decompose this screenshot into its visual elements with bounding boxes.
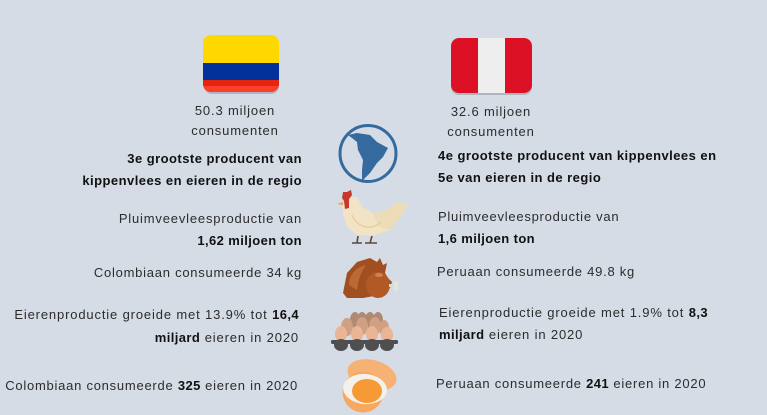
text: Colombia poultry production [119, 211, 302, 248]
text: Peru poultry production: 1,6 miljoen ton [438, 231, 535, 246]
population: Colombia [191, 103, 279, 138]
population: Colombia: consumenten [191, 123, 279, 138]
text: Peru egg production [439, 305, 708, 342]
text: Peru egg production: Eierenproductie groeide met 1.9% tot 8,3 [439, 305, 708, 320]
text: Peru eggs consumed: Peruaan consumeerde 241 eieren in 2020 [436, 376, 706, 391]
population: Peru [447, 104, 535, 139]
icon: egg tray [331, 312, 398, 351]
text: Colombia eggs consumed: Colombiaan consumeerde 325 eieren in 2020 [5, 378, 298, 393]
text: Colombia ranking: 3e grootste producent van [127, 151, 302, 166]
population: Colombia: 50.3 miljoen [195, 103, 275, 118]
text: Peru egg production: miljard eieren in 2020 [439, 327, 583, 342]
text: Peru poultry production [438, 209, 619, 246]
text: Peru poultry production: Pluimveevleesproductie van [438, 209, 619, 224]
text: Colombia poultry production: Pluimveevleesproductie van [119, 211, 302, 226]
icon: broken egg [342, 359, 396, 412]
text: Peru ranking: 5e van eieren in de regio [438, 170, 601, 185]
icon: chicken [337, 190, 408, 244]
text: Colombia egg production: Eierenproductie groeide met 13.9% tot 16,4 [14, 307, 299, 322]
icon: South America globe [338, 124, 398, 183]
text: Peru ranking [438, 148, 716, 185]
text: Peru consumption kg: Peruaan consumeerde 49.8 kg [437, 264, 635, 279]
text: Colombia egg production [14, 307, 299, 345]
text: Colombia ranking [82, 151, 302, 188]
text: Peru ranking: 4e grootste producent van kippenvlees en [438, 148, 716, 163]
text: Colombia poultry production: 1,62 miljoen ton [197, 233, 302, 248]
icon: roast chicken [343, 258, 398, 298]
text: Colombia consumption kg: Colombiaan consumeerde 34 kg [94, 265, 302, 280]
flag: Colombia [203, 35, 279, 94]
flag: Peru [451, 38, 532, 95]
text: Colombia egg production: miljard eieren in 2020 [155, 330, 299, 345]
population: Peru: consumenten [447, 124, 535, 139]
text: Colombia ranking: kippenvlees en eieren in de regio [82, 173, 302, 188]
population: Peru: 32.6 miljoen [451, 104, 531, 119]
